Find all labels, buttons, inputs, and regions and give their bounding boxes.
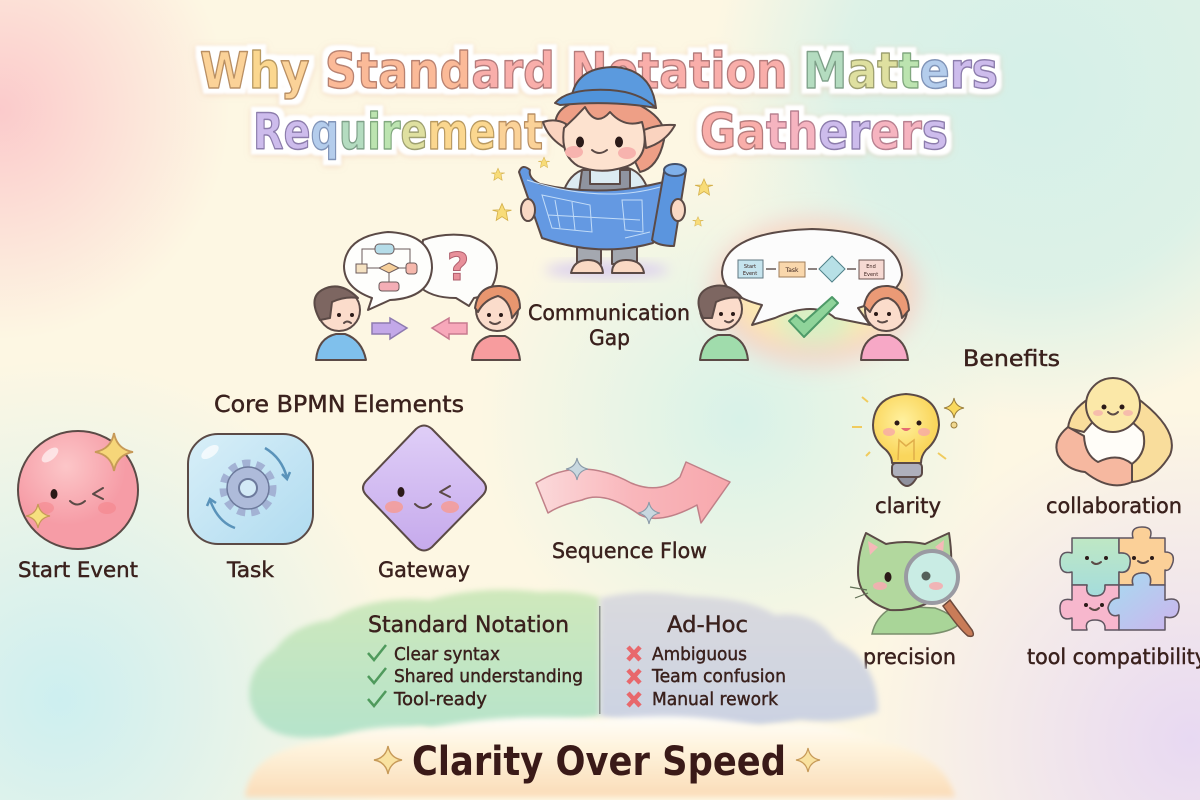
mini process: start, task, gateway, end: Task xyxy=(785,267,799,274)
green check xyxy=(789,297,838,337)
left person xyxy=(314,286,366,360)
question mark: ? xyxy=(447,245,469,289)
hair xyxy=(555,100,664,172)
right person xyxy=(861,286,909,360)
gateway icon xyxy=(363,426,486,550)
check list: Shared understanding xyxy=(394,666,583,687)
arrow purple xyxy=(372,318,407,339)
check list: Tool-ready xyxy=(393,689,487,710)
cap xyxy=(572,67,656,108)
label: task: Task xyxy=(226,558,275,582)
label: communication gap: Communication xyxy=(528,301,690,325)
heading: Ad-Hoc xyxy=(667,613,748,638)
label: sequence flow: Sequence Flow xyxy=(552,539,707,563)
right person xyxy=(472,286,520,360)
heading: benefits: Benefits xyxy=(963,347,1060,372)
label: clarity: clarity xyxy=(875,494,941,518)
face xyxy=(563,107,645,171)
mini process: start, task, gateway, end: End xyxy=(866,264,876,270)
communication gap: confused pair xyxy=(314,232,520,360)
label: collaboration: collaboration xyxy=(1046,494,1182,518)
gear xyxy=(223,463,273,513)
elf mascot holding blueprint xyxy=(491,67,713,278)
sparkle right xyxy=(796,748,820,772)
icon: collaboration hands xyxy=(1056,378,1172,485)
check list: Clear syntax xyxy=(394,644,500,665)
icon: light bulb xyxy=(852,394,964,486)
mini process: start, task, gateway, end: Start xyxy=(744,264,756,270)
shirt and overalls xyxy=(564,168,648,190)
bubble flowchart xyxy=(344,232,432,310)
label: communication gap: Gap xyxy=(589,326,630,350)
label: start event: Start Event xyxy=(18,558,138,582)
label: precision: precision xyxy=(863,645,956,669)
footer cloud banner xyxy=(245,716,955,797)
mini process: start, task, gateway, end xyxy=(738,256,884,282)
cross list: Manual rework xyxy=(652,689,779,710)
mini process: start, task, gateway, end: Event xyxy=(743,271,757,277)
heading: Standard Notation xyxy=(368,613,569,638)
bubble question xyxy=(418,235,497,306)
rainbow glow xyxy=(713,220,917,364)
slogan: Clarity Over Speed xyxy=(412,739,786,785)
title: Gatherers xyxy=(700,103,948,161)
task icon xyxy=(188,434,313,544)
heading: core BPMN elements: Core BPMN Elements xyxy=(214,392,464,418)
mini flowchart xyxy=(356,244,417,291)
arrow pink xyxy=(432,318,467,339)
blueprint sheet xyxy=(519,167,664,249)
rolled end xyxy=(652,167,686,246)
hands xyxy=(521,199,535,221)
label: communication gap xyxy=(528,301,690,350)
icon: puzzle pieces xyxy=(1060,527,1179,630)
sparkles xyxy=(491,157,713,226)
comparison panel: ad-hoc xyxy=(599,592,878,727)
left person xyxy=(699,286,748,360)
communication gap: aligned pair xyxy=(699,220,917,364)
cross list: Ambiguous xyxy=(652,644,747,665)
shared bubble xyxy=(722,229,902,325)
ears xyxy=(543,120,566,148)
start event icon xyxy=(18,431,138,549)
comparison panel: standard notation xyxy=(249,590,600,738)
title: Requirement xyxy=(253,103,543,161)
cross list xyxy=(628,644,786,710)
mini process: start, task, gateway, end: Event xyxy=(864,272,878,278)
sequence flow arrow xyxy=(536,458,730,524)
check list xyxy=(368,644,583,710)
icon: cat with magnifier xyxy=(850,533,973,636)
title: Why Standard Notation Matters xyxy=(200,42,998,100)
label: gateway: Gateway xyxy=(378,558,470,582)
title xyxy=(200,42,998,161)
legs and shoes xyxy=(571,240,644,273)
cross list: Team confusion xyxy=(651,666,786,687)
sparkle left xyxy=(374,746,402,774)
